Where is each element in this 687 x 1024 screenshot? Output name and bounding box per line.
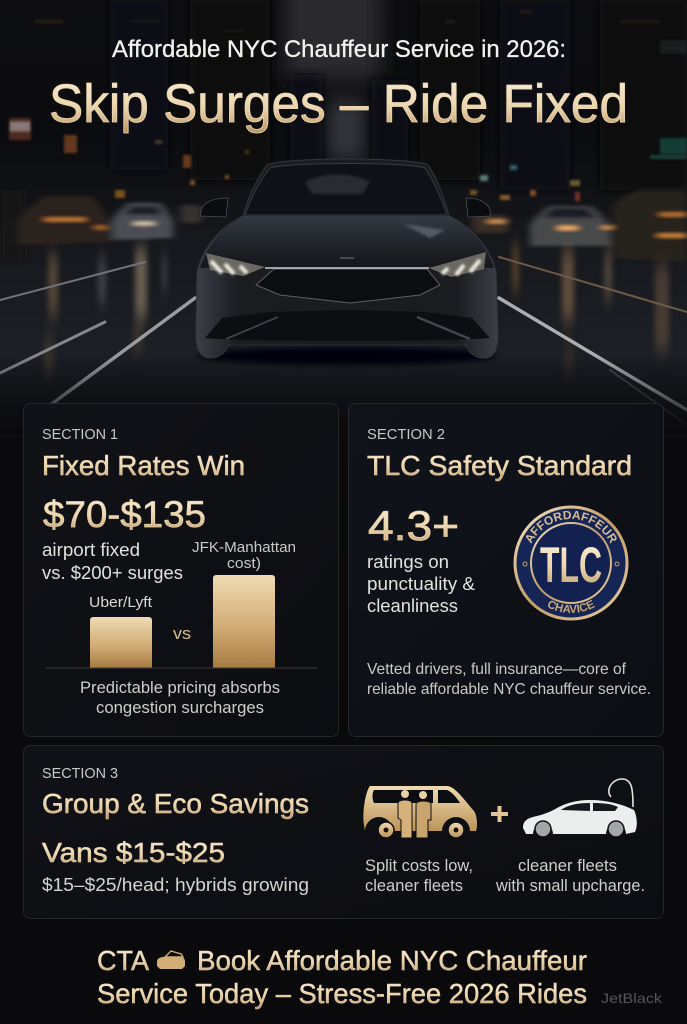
van caption: cleaner fleets [365, 877, 463, 895]
section 2 label: SECTION 2 [367, 426, 445, 443]
call to action: Service Today – Stress-Free 2026 Rides [97, 978, 587, 1009]
call to action: CTA [97, 945, 149, 976]
bar chart: Uber/Lyft vs JFK-Manhattan: cost) [227, 555, 261, 572]
section 2 caption: reliable affordable NYC chauffeur service. [367, 681, 651, 698]
section 2 heading: TLC Safety Standard [367, 450, 632, 481]
hero photo: rainy NYC street at night [0, 0, 687, 436]
section 2 caption: Vetted drivers, full insurance—core of [367, 661, 627, 678]
vans description: $15–$25/head; hybrids growing [42, 874, 309, 895]
rating stat: 4.3+ [368, 502, 459, 549]
icon: small gold car [157, 951, 185, 969]
price description: airport fixed [42, 539, 140, 560]
van caption: Split costs low, [365, 857, 473, 875]
fade from hero into background [0, 355, 687, 435]
hybrid caption: with small upcharge. [495, 877, 645, 895]
subtitle: Affordable NYC Chauffeur Service in 2026: [112, 36, 566, 63]
icon: TLC badge: AFFORDAFFEUR [526, 510, 617, 544]
bar chart: Uber/Lyft vs JFK-Manhattan [46, 539, 318, 668]
call to action [97, 945, 587, 1009]
rating description: cleanliness [367, 595, 458, 616]
icon: plus sign [491, 806, 508, 822]
icon: white hybrid car with charging cable [523, 779, 637, 837]
section 3 label: SECTION 3 [42, 765, 118, 782]
panel: section 3 group and eco savings [24, 746, 664, 918]
main title: Skip Surges – Ride Fixed [49, 74, 628, 134]
icon: TLC badge [514, 506, 628, 620]
section 1 caption: Predictable pricing absorbs [80, 678, 280, 697]
hybrid caption: cleaner fleets [518, 857, 617, 875]
icon: gold van with two passengers [363, 786, 477, 838]
bar chart: Uber/Lyft vs JFK-Manhattan: JFK-Manhattan [192, 539, 296, 556]
bar chart: Uber/Lyft vs JFK-Manhattan: Uber/Lyft [89, 594, 153, 611]
panel: section 2 TLC safety [348, 403, 664, 737]
watermark: JetBlack [601, 990, 663, 1006]
call to action: Book Affordable NYC Chauffeur [197, 945, 587, 976]
section 3 heading: Group & Eco Savings [42, 788, 309, 819]
blurred traffic on both sides [0, 190, 687, 262]
rating description: ratings on [367, 551, 449, 572]
vans price stat: Vans $15-$25 [42, 837, 225, 868]
price description: vs. $200+ surges [42, 562, 183, 583]
rating description: punctuality & [367, 573, 476, 594]
price range stat: $70-$135 [43, 494, 206, 535]
icon: TLC badge: CHAVICE [548, 600, 595, 614]
panel: section 1 fixed rates [24, 404, 338, 736]
section 1 heading: Fixed Rates Win [42, 450, 245, 481]
wet road reflections [44, 245, 669, 375]
icon: TLC badge: TLC [540, 537, 602, 593]
section 1 caption: congestion surcharges [96, 698, 264, 717]
hero car: black sedan, front view [196, 159, 498, 365]
section 1 label: SECTION 1 [42, 426, 118, 443]
bar chart: Uber/Lyft vs JFK-Manhattan: vs [173, 624, 191, 643]
